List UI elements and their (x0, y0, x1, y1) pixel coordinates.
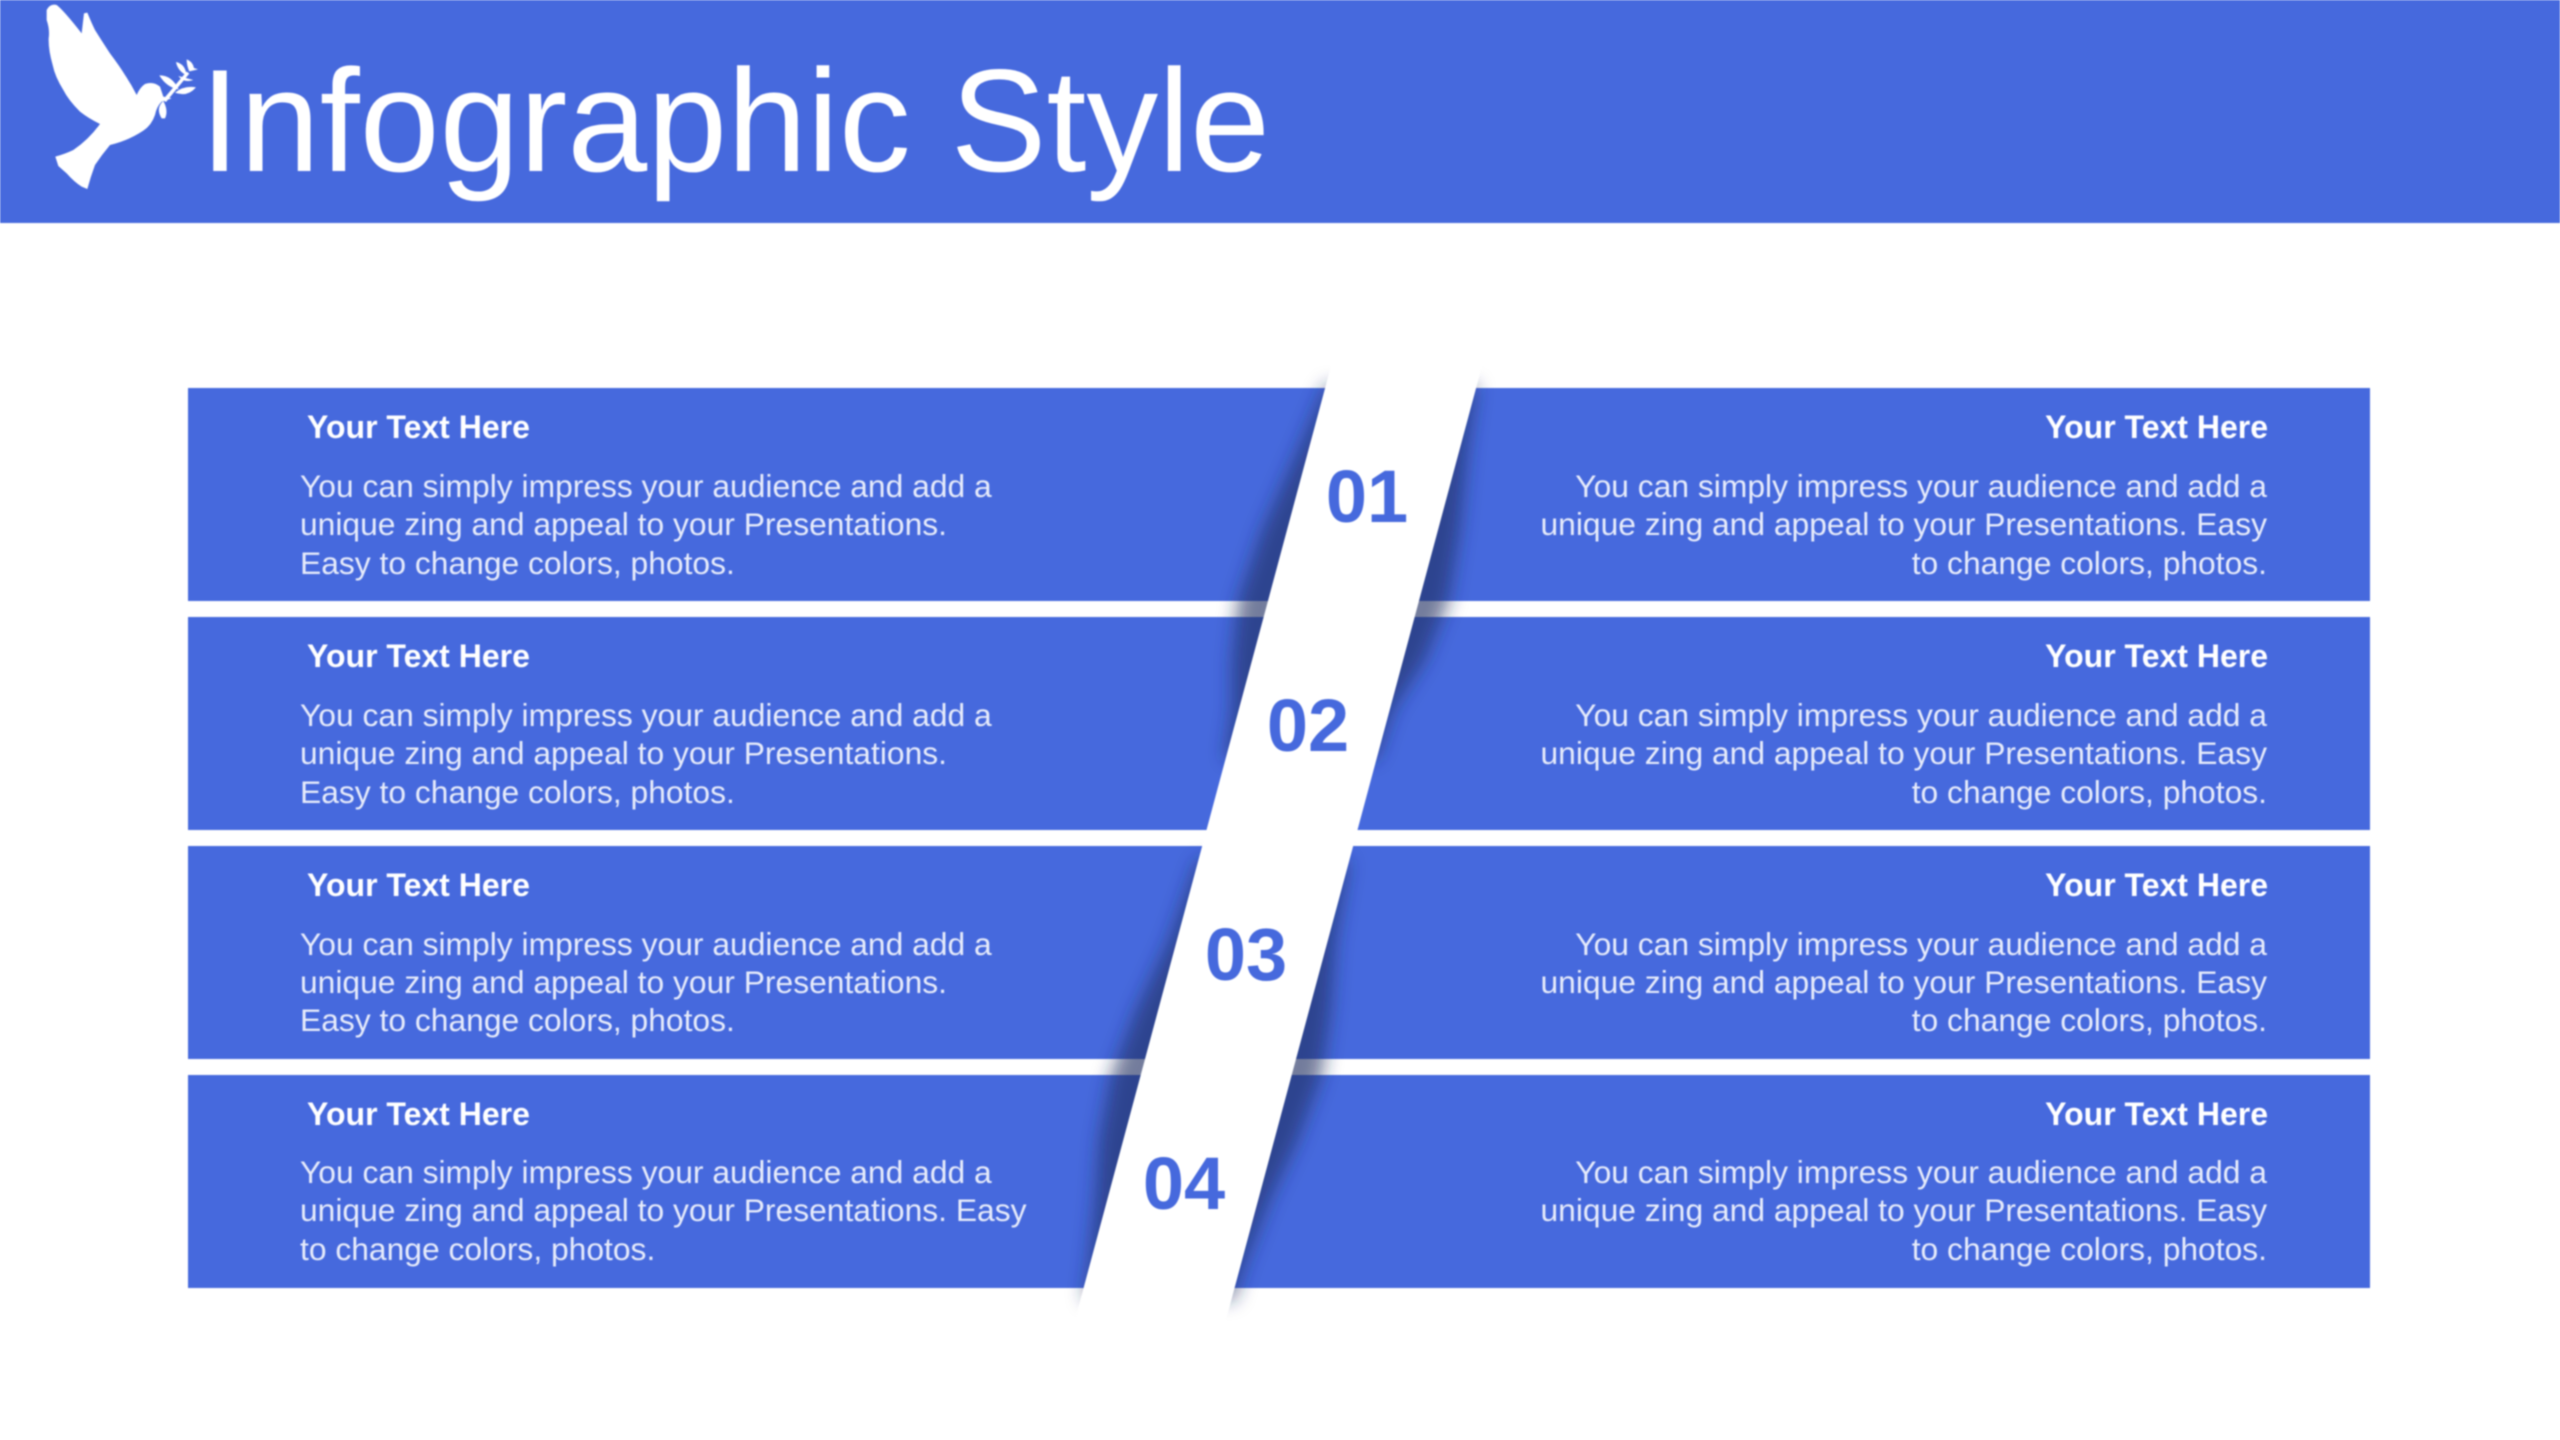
icon: dove with olive branch (47, 5, 198, 189)
panel: row 3 right: Your Text Here (2045, 867, 2268, 903)
panel: row 2 right: unique zing and appeal to your Presentations. Easy (1540, 735, 2267, 771)
number 01: 01 (1326, 455, 1408, 538)
panel: row 4 right (1231, 1075, 2370, 1288)
panel: row 1 right: Your Text Here (2045, 409, 2268, 445)
panel: row 4 right: unique zing and appeal to your Presentations. Easy (1540, 1192, 2267, 1228)
panel: row 3 left: You can simply impress your audience and add a (300, 926, 992, 962)
panel: row 1 left: Your Text Here (307, 409, 530, 445)
panel: row 1 right: unique zing and appeal to your Presentations. Easy (1540, 506, 2267, 542)
panel: row 4 left: unique zing and appeal to your Presentations. Easy (300, 1192, 1027, 1228)
diagonal white stripe (1070, 340, 1489, 1340)
panel: row 2 right: You can simply impress your audience and add a (1575, 697, 2267, 733)
panel: row 1 right (1414, 388, 2370, 601)
panel: row 4 right: to change colors, photos. (1912, 1231, 2267, 1267)
number 04: 04 (1143, 1142, 1225, 1225)
number 03: 03 (1205, 913, 1287, 996)
panel: row 1 left: Easy to change colors, photos. (300, 545, 735, 581)
panel: row 4 left: to change colors, photos. (300, 1231, 655, 1267)
panel: row 2 left: You can simply impress your audience and add a (300, 697, 992, 733)
panel: row 3 right: unique zing and appeal to your Presentations. Easy (1540, 964, 2267, 1000)
panel: row 2 left: unique zing and appeal to your Presentations. (300, 735, 947, 771)
stripe shadows (1084, 385, 1477, 1300)
panel: row 4 right: Your Text Here (2045, 1096, 2268, 1132)
panel: row 1 right: to change colors, photos. (1912, 545, 2267, 581)
panel: row 2 right: Your Text Here (2045, 638, 2268, 674)
header band (0, 0, 2560, 223)
panel: row 2 left: Your Text Here (307, 638, 530, 674)
panel: row 3 left: Easy to change colors, photos. (300, 1002, 735, 1038)
panel: row 2 left (188, 617, 1268, 830)
panel: row 1 left: unique zing and appeal to your Presentations. (300, 506, 947, 542)
number 02: 02 (1267, 684, 1349, 767)
panel: row 2 right: to change colors, photos. (1912, 774, 2267, 810)
panel: row 4 right: You can simply impress your audience and add a (1575, 1154, 2267, 1190)
panel: row 1 right: You can simply impress your audience and add a (1575, 468, 2267, 504)
panel: row 3 left (188, 846, 1207, 1059)
panel: row 4 left (188, 1075, 1146, 1288)
panel: row 3 right (1291, 846, 2370, 1059)
panel: row 4 left: You can simply impress your audience and add a (300, 1154, 992, 1190)
panel: row 1 left: You can simply impress your audience and add a (300, 468, 992, 504)
panel: row 2 left: Easy to change colors, photos. (300, 774, 735, 810)
panel: row 1 left (188, 388, 1330, 601)
panel: row 2 right (1352, 617, 2370, 830)
panel: row 3 left: unique zing and appeal to your Presentations. (300, 964, 947, 1000)
panel: row 3 right: to change colors, photos. (1912, 1002, 2267, 1038)
title: Infographic Style (200, 39, 1270, 202)
panel: row 4 left: Your Text Here (307, 1096, 530, 1132)
panel: row 3 left: Your Text Here (307, 867, 530, 903)
panel: row 3 right: You can simply impress your audience and add a (1575, 926, 2267, 962)
